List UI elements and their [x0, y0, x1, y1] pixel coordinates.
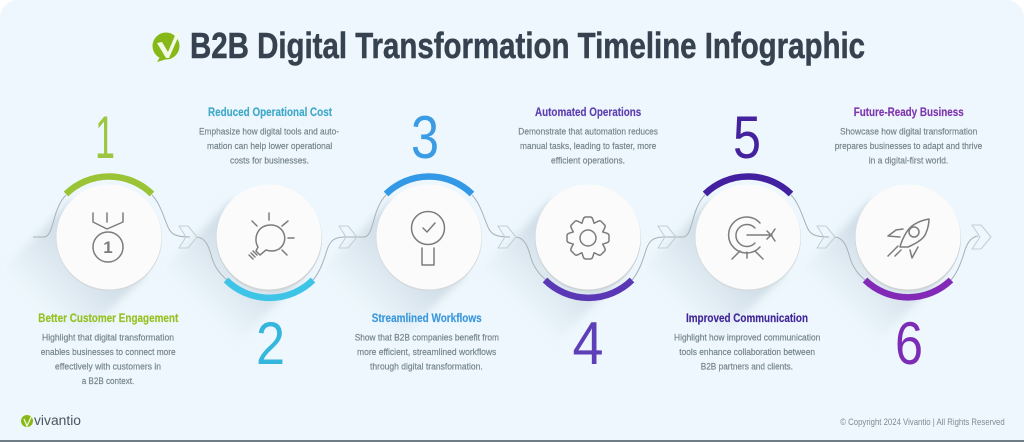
number 4: 4 — [572, 310, 604, 377]
step 3 — [355, 104, 499, 372]
text: future-ready business: prepares businesses to adapt and thrive — [835, 141, 982, 152]
text: reduced operational cost: Emphasize how digital tools and auto- — [199, 126, 339, 138]
footer logo: vivantio — [34, 413, 81, 428]
text: streamlined workflows: Streamlined Workflows — [372, 313, 482, 325]
number 2: 2 — [256, 310, 285, 377]
text: streamlined workflows: Show that B2B companies benefit from — [355, 332, 499, 344]
text: future-ready business: Future-Ready Business — [854, 107, 964, 119]
title — [152, 25, 865, 66]
connector wires — [33, 195, 978, 280]
icon: medal: 1 — [103, 238, 113, 257]
step 4 — [518, 107, 658, 377]
text: better customer engagement: Better Customer Engagement — [38, 313, 178, 325]
icon: check pin — [412, 212, 444, 265]
text: automated operations: manual tasks, leading to faster, more — [520, 141, 656, 152]
text: reduced operational cost: mation can help lower operational — [207, 141, 332, 152]
text: future-ready business: in a digital-first world. — [869, 156, 948, 166]
circle 1 — [56, 184, 162, 291]
text: automated operations: efficient operations. — [551, 156, 625, 166]
arc 5 — [705, 177, 791, 194]
arc 1 — [66, 177, 152, 194]
number 1: 1 — [95, 104, 115, 171]
icon: rocket — [888, 219, 929, 258]
step 1 — [38, 104, 178, 387]
chevron arrows — [179, 225, 991, 249]
step 2 — [199, 107, 339, 377]
title text: B2B Digital Transformation Timeline Infographic — [190, 25, 865, 66]
icon: target — [729, 217, 775, 259]
text: streamlined workflows — [355, 313, 499, 372]
arc 3 — [386, 177, 472, 194]
text: future-ready business: Showcase how digital transformation — [840, 126, 977, 138]
circle 6 — [855, 184, 961, 292]
text: improved communication: tools enhance collaboration between — [679, 347, 815, 358]
text: better customer engagement: Highlight that digital transformation — [42, 332, 174, 344]
number 3: 3 — [411, 104, 439, 171]
text: future-ready business — [835, 107, 982, 166]
icon: light bulb — [249, 213, 294, 259]
step 5 — [674, 104, 820, 372]
arc 2 — [226, 280, 313, 298]
text: better customer engagement: a B2B context. — [82, 376, 134, 387]
circle 2 — [216, 184, 322, 292]
icon: gear — [567, 217, 609, 259]
text: improved communication: Highlight how improved communication — [674, 332, 820, 344]
step 6 — [835, 107, 982, 377]
number 5: 5 — [733, 104, 761, 171]
arc 4 — [545, 280, 632, 298]
arc 6 — [865, 280, 951, 297]
circle 3 — [376, 184, 482, 291]
text: automated operations: Automated Operations — [535, 107, 641, 119]
icon: title logo — [152, 31, 180, 62]
text: streamlined workflows: more efficient, streamlined workflows — [357, 347, 496, 358]
text: reduced operational cost — [199, 107, 339, 166]
text: better customer engagement: enables businesses to connect more — [41, 347, 176, 358]
text: automated operations — [518, 107, 658, 166]
text: better customer engagement: effectively with customers in — [55, 362, 161, 372]
text: reduced operational cost: Reduced Operational Cost — [208, 107, 332, 119]
number 6: 6 — [895, 310, 923, 377]
circle 4 — [535, 184, 641, 292]
text: improved communication — [674, 313, 820, 372]
text: better customer engagement — [38, 313, 178, 387]
icon: medal — [93, 213, 123, 262]
text: streamlined workflows: through digital transformation. — [370, 362, 483, 372]
text: reduced operational cost: costs for businesses. — [230, 156, 309, 166]
text: automated operations: Demonstrate that automation reduces — [518, 126, 658, 138]
circle 5 — [695, 184, 801, 291]
long shadows — [2, 200, 945, 344]
text: improved communication: B2B partners and clients. — [701, 362, 793, 372]
text: improved communication: Improved Communication — [686, 313, 808, 325]
